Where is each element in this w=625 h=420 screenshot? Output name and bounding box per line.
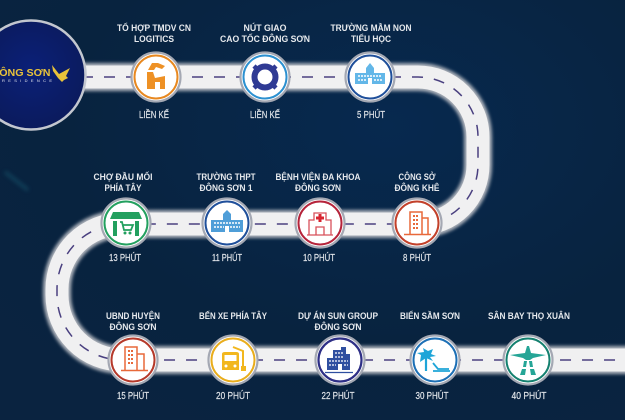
logo badge (0, 20, 86, 130)
stop: office: ĐÔNG KHÊ (394, 182, 440, 194)
stop: interchange: LIỀN KẾ (250, 108, 280, 121)
stop: logistics (117, 22, 191, 121)
stop: preschool: TIỂU HỌC (351, 33, 391, 45)
stop: office: CÔNG SỞ (398, 171, 436, 183)
stop: wholesale market: PHÍA TÂY (104, 182, 142, 194)
stop: Sun Group project: ĐÔNG SƠN (314, 321, 362, 333)
stop: interchange: CAO TỐC ĐÔNG SƠN (220, 33, 310, 45)
stop: office: 8 PHÚT (403, 251, 431, 264)
stop: Sam Son beach: BIỂN SẦM SƠN (400, 310, 460, 322)
logo subtitle: RESIDENCE (2, 78, 52, 83)
stop: hospital (276, 171, 361, 264)
stop: district committee: 15 PHÚT (117, 389, 149, 402)
icon: logo bird wing (52, 65, 70, 82)
stop: preschool: 5 PHÚT (357, 108, 385, 121)
stop: Tho Xuan airport: SÂN BAY THỌ XUÂN (488, 310, 570, 322)
road (57, 77, 625, 360)
stop: Sam Son beach (400, 310, 460, 402)
stop: bus station: BẾN XE PHÍA TÂY (199, 310, 268, 322)
stop: district committee: UBND HUYỆN (106, 310, 160, 322)
stop: interchange (220, 22, 310, 121)
stop: Sun Group project: 22 PHÚT (322, 389, 354, 402)
stop: high school (196, 171, 256, 264)
stop: hospital: 10 PHÚT (303, 251, 335, 264)
stop: Tho Xuan airport: 40 PHÚT (512, 389, 546, 402)
stop: logistics: LOGITICS (134, 34, 174, 45)
stop: wholesale market: 13 PHÚT (109, 251, 141, 264)
stop: high school: ĐÔNG SƠN 1 (200, 182, 253, 194)
stop: hospital: BỆNH VIỆN ĐA KHOA (276, 171, 361, 183)
stop: wholesale market (94, 171, 152, 264)
stop: Sam Son beach: 30 PHÚT (416, 389, 448, 402)
stop: Sun Group project: DỰ ÁN SUN GROUP (298, 311, 379, 322)
stop: high school: TRƯỜNG THPT (196, 171, 256, 183)
stop: office (392, 171, 442, 264)
stop: preschool (330, 22, 412, 121)
stop: district committee: ĐÔNG SƠN (110, 321, 157, 333)
stop: bus station: 20 PHÚT (216, 389, 250, 402)
stop: wholesale market: CHỢ ĐẦU MỐI (94, 171, 152, 183)
stop: bus station (199, 310, 268, 402)
stop: logistics: TỔ HỢP TMDV CN (117, 22, 191, 34)
stop: logistics: LIỀN KẾ (139, 108, 169, 121)
stop: interchange: NÚT GIAO (244, 22, 286, 34)
stop: district committee (106, 310, 160, 402)
stop: preschool: TRƯỜNG MẦM NON (330, 22, 412, 34)
stop: Tho Xuan airport (488, 310, 570, 402)
stop: high school: 11 PHÚT (212, 251, 242, 264)
stop: Sun Group project (298, 311, 379, 402)
stop: hospital: ĐÔNG SƠN (295, 182, 341, 194)
